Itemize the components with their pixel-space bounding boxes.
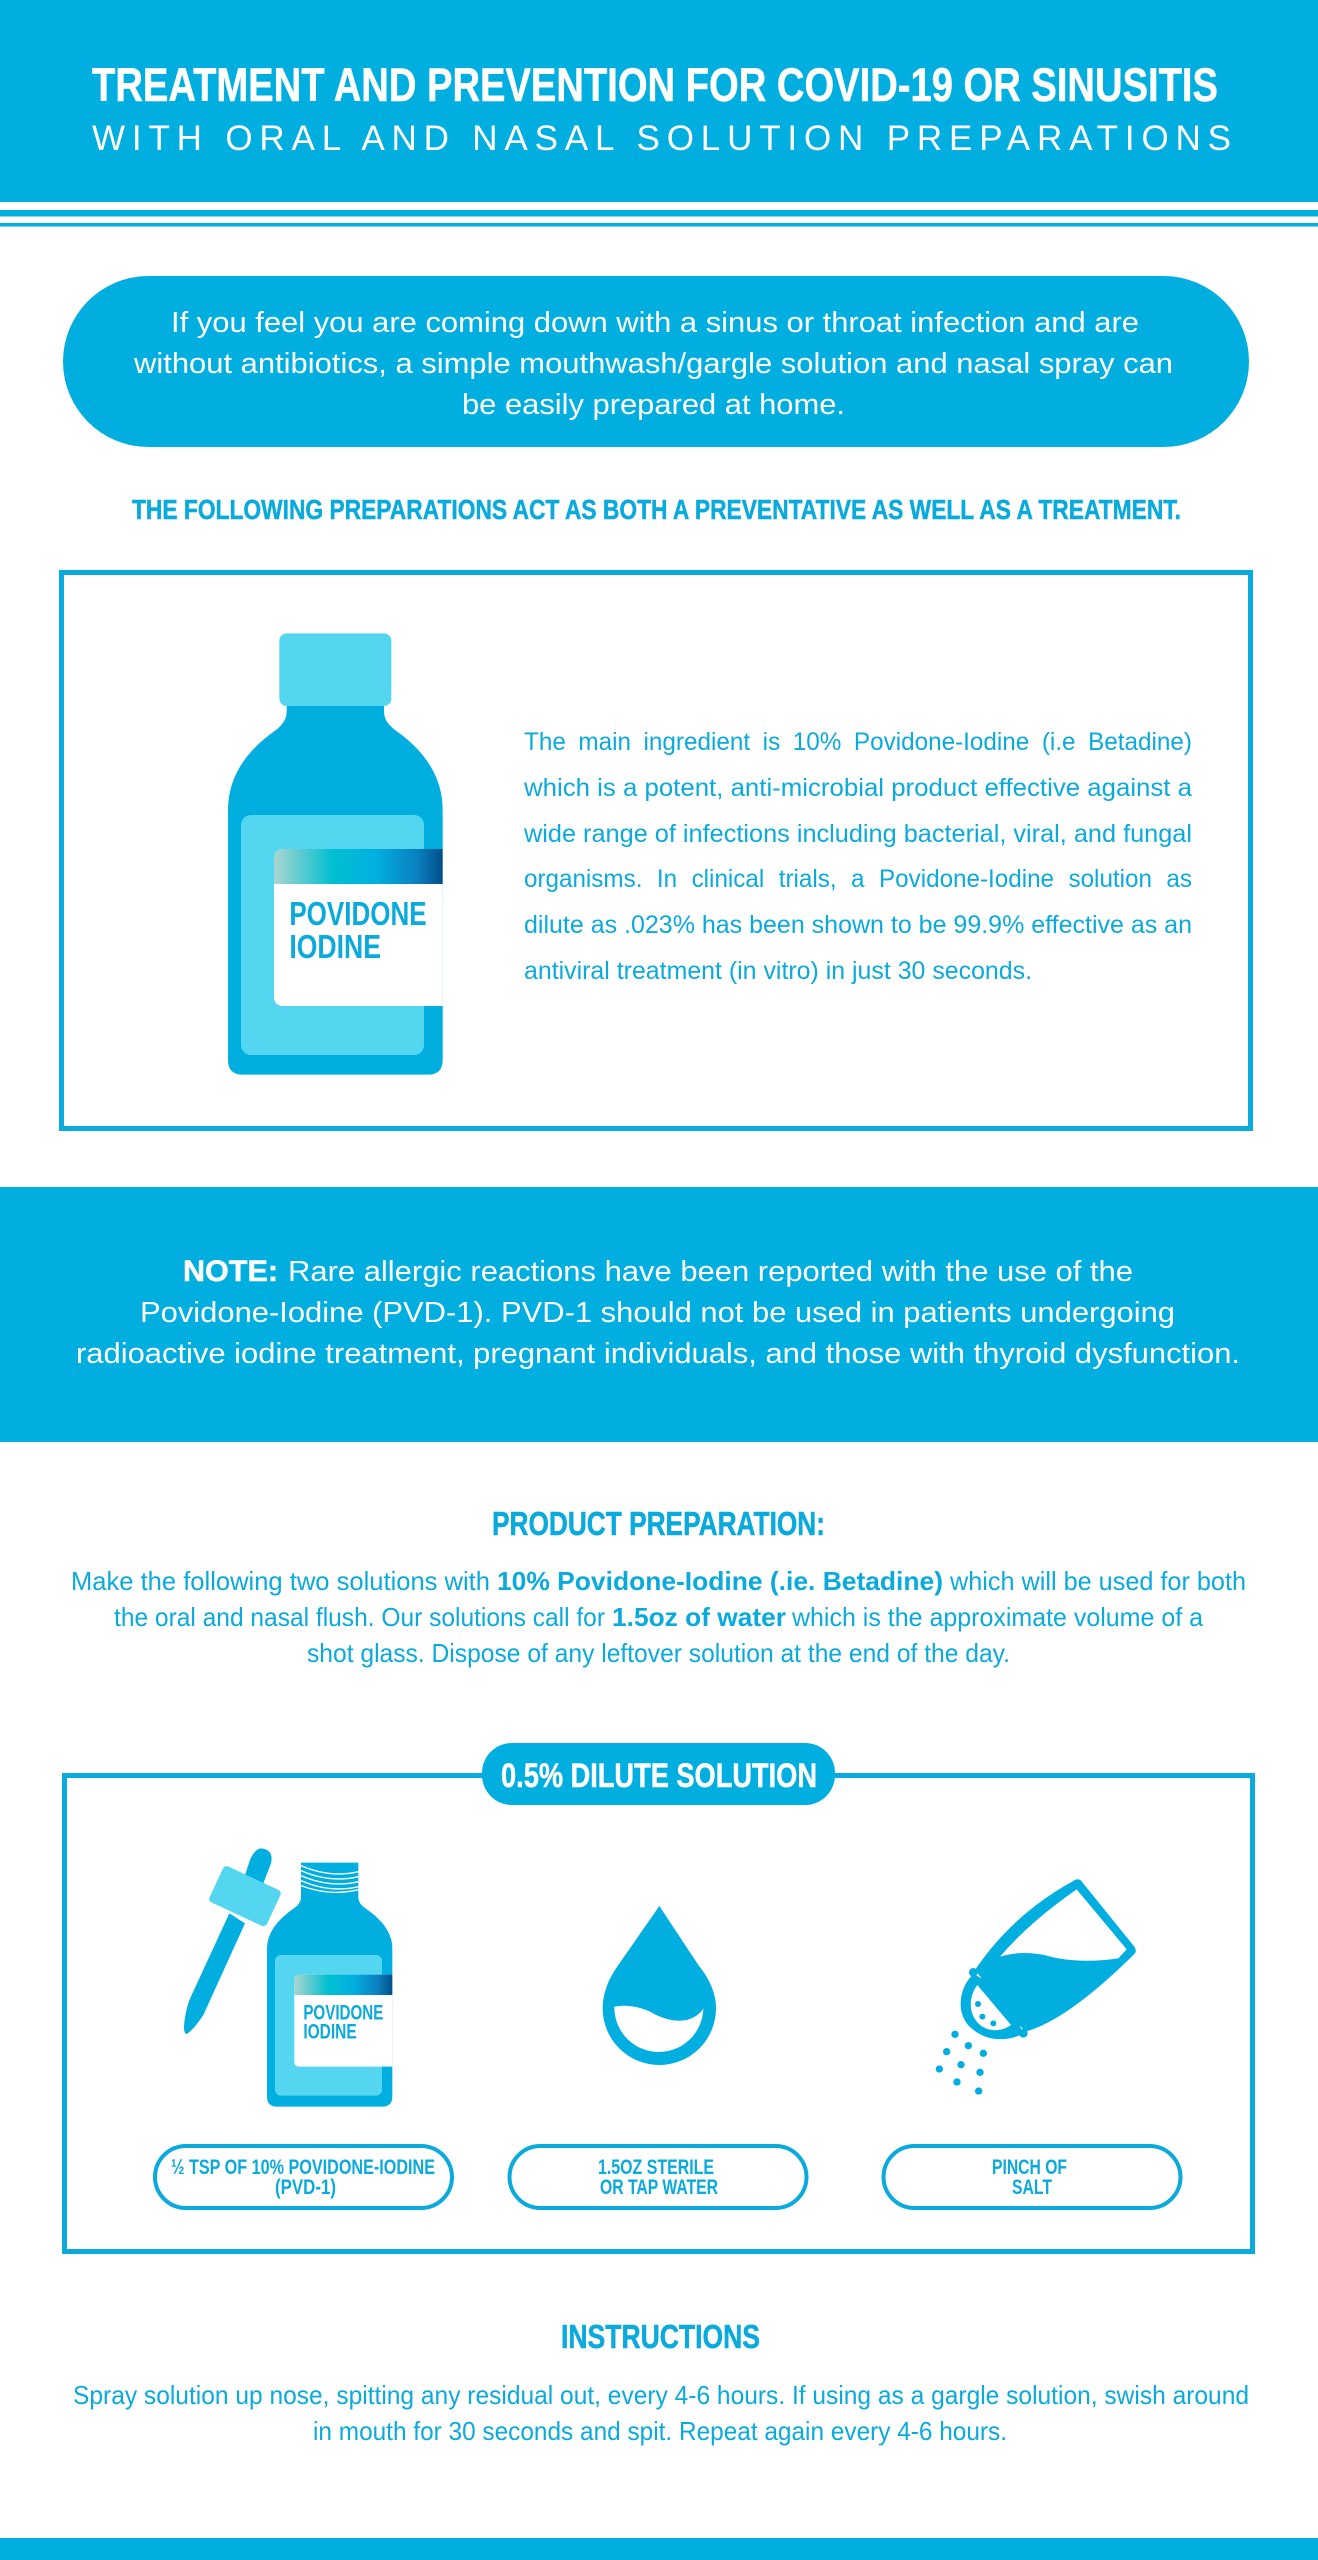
intro callout pill: If you feel you are coming down with a sinus or throat infection and are bbox=[171, 307, 1139, 339]
intro callout pill: without antibiotics, a simple mouthwash/gargle solution and nasal spray can bbox=[133, 348, 1173, 380]
product preparation text: the oral and nasal flush. Our solutions call for bbox=[114, 1602, 605, 1632]
product preparation text: Make the following two solutions with bbox=[71, 1566, 490, 1596]
note band: radioactive iodine treatment, pregnant individuals, and those with thyroid dysfunction. bbox=[76, 1338, 1240, 1370]
footer band bbox=[0, 2538, 1318, 2560]
icon: dropper and bottle: IODINE bbox=[303, 2021, 357, 2044]
note band: NOTE: bbox=[183, 1255, 278, 1288]
note band bbox=[0, 1187, 1318, 1442]
note band: Rare allergic reactions have been reported with the use of the bbox=[288, 1256, 1133, 1288]
subtitle: WITH ORAL AND NASAL SOLUTION PREPARATIONS bbox=[92, 119, 1231, 158]
label: water amount: OR TAP WATER bbox=[600, 2176, 718, 2199]
heading: instructions: INSTRUCTIONS bbox=[561, 2318, 760, 2355]
panel heading pill: 0.5% DILUTE SOLUTION bbox=[501, 1757, 817, 1795]
ingredient description: organisms. In clinical trials, a Povidone-Iodine solution as bbox=[524, 865, 1192, 893]
ingredient description: dilute as .023% has been shown to be 99.9% effective as an bbox=[524, 911, 1192, 939]
ingredient description: antiviral treatment (in vitro) in just 30 seconds. bbox=[524, 957, 1032, 985]
intro callout pill: be easily prepared at home. bbox=[462, 389, 845, 421]
icon: povidone iodine bottle: IODINE bbox=[289, 928, 381, 965]
label: water amount: 1.5OZ STERILE bbox=[598, 2156, 714, 2179]
label: water amount bbox=[510, 2146, 806, 2208]
panel: main ingredient bbox=[62, 572, 1250, 1128]
panel: dilute solution bbox=[64, 1743, 1252, 2252]
label: povidone-iodine amount bbox=[155, 2146, 452, 2208]
ingredient description bbox=[523, 728, 1192, 985]
icon: povidone iodine bottle: POVIDONE bbox=[289, 895, 427, 932]
icon: dropper and bottle bbox=[184, 1848, 392, 2107]
heading: product preparation: PRODUCT PREPARATION: bbox=[492, 1505, 825, 1542]
icon: water drop bbox=[603, 1906, 716, 2065]
icon: povidone iodine bottle bbox=[228, 633, 443, 1075]
product preparation text: 10% Povidone-Iodine (.ie. Betadine) bbox=[497, 1566, 943, 1596]
product preparation text: shot glass. Dispose of any leftover solution at the end of the day. bbox=[307, 1638, 1010, 1668]
label: salt amount: PINCH OF bbox=[992, 2156, 1067, 2179]
ingredient description: wide range of infections including bacterial, viral, and fungal bbox=[523, 820, 1192, 848]
label: salt amount: SALT bbox=[1012, 2176, 1052, 2199]
icon: dropper and bottle: POVIDONE bbox=[303, 2001, 383, 2024]
product preparation text: which will be used for both bbox=[949, 1566, 1246, 1596]
icon: salt shaker bbox=[936, 1879, 1136, 2095]
instructions text: Spray solution up nose, spitting any residual out, every 4-6 hours. If using as a gargle solution, swish around bbox=[73, 2380, 1249, 2410]
intro callout pill bbox=[63, 276, 1249, 447]
instructions text: in mouth for 30 seconds and spit. Repeat again every 4-6 hours. bbox=[313, 2416, 1007, 2446]
product preparation text: 1.5oz of water bbox=[612, 1602, 786, 1632]
panel heading pill bbox=[482, 1743, 835, 1805]
ingredient description: which is a potent, anti-microbial product effective against a bbox=[523, 774, 1192, 802]
ingredient description: The main ingredient is 10% Povidone-Iodine (i.e Betadine) bbox=[524, 728, 1192, 756]
product preparation text: which is the approximate volume of a bbox=[791, 1602, 1204, 1632]
header banner bbox=[0, 0, 1318, 226]
label: povidone-iodine amount: ½ TSP OF 10% POVIDONE-IODINE bbox=[171, 2156, 435, 2179]
label: povidone-iodine amount: (PVD-1) bbox=[275, 2176, 336, 2199]
label: salt amount bbox=[884, 2146, 1180, 2208]
note band: Povidone-Iodine (PVD-1). PVD-1 should not be used in patients undergoing bbox=[140, 1297, 1175, 1329]
instructions text bbox=[73, 2380, 1249, 2446]
product preparation text bbox=[71, 1566, 1246, 1668]
